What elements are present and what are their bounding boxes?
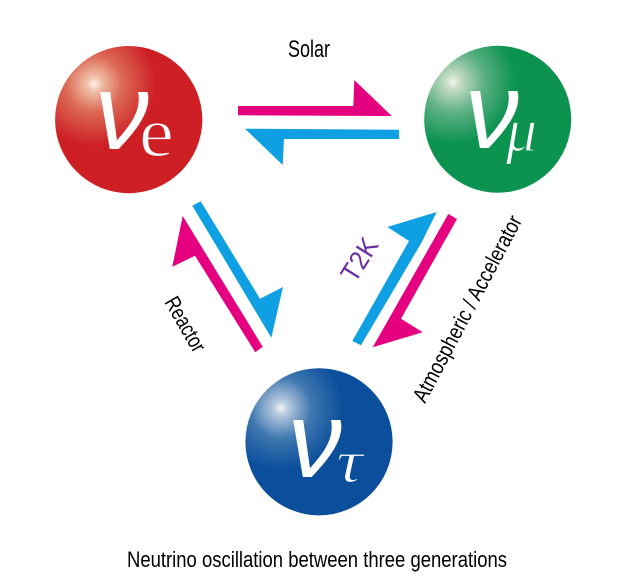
arrow: T2K, tau to muon <box>352 212 437 345</box>
label: Reactor: Reactor <box>160 292 211 356</box>
sphere: tau neutrino <box>245 368 393 515</box>
sphere: tau neutrino: τ <box>336 428 366 495</box>
sphere: electron neutrino: ν <box>95 51 149 172</box>
sphere: tau neutrino: ν <box>288 379 342 500</box>
caption: Neutrino oscillation between three generations <box>127 547 507 572</box>
sphere: muon neutrino <box>424 46 571 193</box>
sphere: muon neutrino: ν <box>465 50 519 171</box>
sphere: electron neutrino: e <box>139 95 174 172</box>
label: Solar: Solar <box>288 36 330 63</box>
arrow: solar, muon to electron <box>245 129 399 165</box>
sphere: muon neutrino: μ <box>505 97 537 165</box>
arrow: reactor, tau to electron <box>172 216 263 352</box>
label: T2K: T2K <box>335 232 384 287</box>
sphere: electron neutrino <box>55 46 202 193</box>
arrow: solar, electron to muon <box>238 80 392 116</box>
arrow: reactor, electron to tau <box>192 201 283 338</box>
arrow: atmospheric, muon to tau <box>373 214 457 347</box>
label: Atmospheric / Accelerator: Atmospheric / Accelerator <box>407 211 527 406</box>
